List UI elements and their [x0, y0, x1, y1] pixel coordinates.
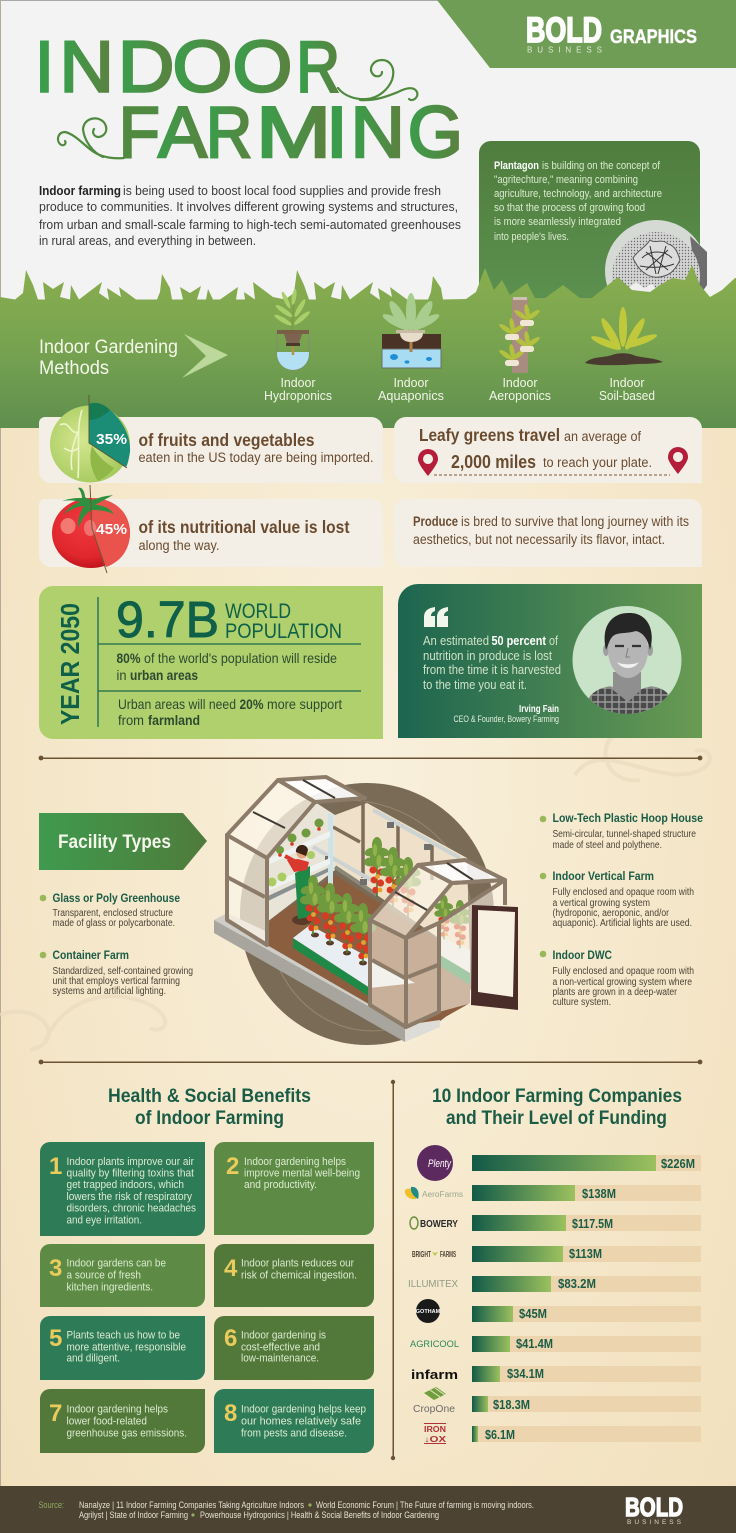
pipes and lamps: [313, 810, 460, 885]
arrow: methods chevron: [182, 334, 228, 378]
stat text: of fruits and vegetables: [138, 430, 315, 450]
benefit card 2: Indoor gardening helps: [244, 1156, 346, 1168]
facility: indoor dwc: plants are grown in a deep-water: [552, 987, 678, 998]
logo: Infarm: infarm: [411, 1367, 458, 1382]
intro paragraph: is being used to boost local food supplies and provide fresh: [123, 183, 441, 198]
benefit card 3: [40, 1244, 205, 1307]
leafy text: 2,000 miles: [451, 452, 536, 472]
bar chart: company funding: [472, 1155, 701, 1442]
urban stats: in: [116, 667, 126, 683]
funding values: $113M: [569, 1247, 602, 1261]
stat text: [138, 430, 374, 465]
right trough: [440, 937, 470, 985]
front trough: [293, 925, 415, 997]
title: O: [233, 28, 292, 108]
method labels: Aeroponics: [489, 388, 551, 403]
greenhouse illustration: [214, 777, 518, 1045]
quote text: [423, 634, 561, 724]
title: I: [326, 93, 348, 173]
side wall: [267, 802, 335, 922]
benefit card 7: Indoor gardening helps: [66, 1404, 168, 1416]
heading: health and social benefits: of Indoor Farming: [135, 1108, 284, 1129]
panel: year 2050: [39, 586, 383, 739]
funding values: $41.4M: [516, 1337, 553, 1351]
panel: 45 percent lost: [39, 485, 383, 573]
plantagon text: is building on the concept of: [542, 160, 661, 172]
benefit card 4: [214, 1244, 374, 1307]
intro paragraph: [39, 183, 461, 248]
logo: AeroFarms: AeroFarms: [422, 1189, 463, 1199]
benefit card 1: disorders, chronic headaches: [66, 1202, 196, 1214]
logo: CropOne: [413, 1387, 455, 1415]
plantagon text: Plantagon: [494, 160, 539, 172]
9.7B population: POPULATION: [225, 620, 342, 643]
icon: aquaponics: [381, 293, 441, 368]
quote text: of: [549, 634, 558, 648]
plantagon text: agriculture, technology, and architecture: [494, 188, 662, 200]
leafy text: to reach your plate.: [543, 455, 652, 470]
facility: vertical farm: aquaponic). Artificial lights are used.: [552, 918, 692, 929]
green grass band: [0, 265, 736, 428]
funding values: $226M: [661, 1157, 695, 1171]
title: [35, 28, 463, 173]
logo: Plenty: [417, 1145, 453, 1181]
title: N: [60, 28, 114, 108]
facility: vertical farm: Fully enclosed and opaque room with: [552, 887, 694, 898]
benefit card 2: [214, 1142, 374, 1235]
benefit card 1: [40, 1142, 205, 1236]
back wall frame: [333, 800, 432, 895]
sources: Nanalyze | 11 Indoor Farming Companies Taking Agriculture Indoors: [79, 1500, 304, 1510]
panel: 35 percent imported: [39, 395, 383, 483]
facility: indoor dwc: Indoor DWC: [552, 948, 612, 962]
facility: glass or poly greenhouse: Transparent, enclosed structure: [52, 908, 173, 919]
facility: vertical farm: [540, 869, 694, 929]
benefit card 5: more attentive, responsible: [66, 1342, 186, 1354]
intro paragraph: Indoor farming: [39, 183, 121, 198]
heading: ten companies: 10 Indoor Farming Companies: [432, 1086, 682, 1107]
heading: ten companies: [432, 1086, 682, 1129]
benefit card 1: 1: [49, 1153, 62, 1180]
facility: glass or poly greenhouse: made of glass or polycarbonate.: [52, 918, 175, 929]
logo: BrightFarms: FARMS: [440, 1250, 456, 1259]
facility: vertical farm: a vertical growing system: [552, 898, 650, 909]
facility: indoor dwc: [540, 948, 694, 1008]
facility: indoor dwc: Fully enclosed and opaque room with: [552, 966, 694, 977]
logo: CropOne: CropOne: [413, 1403, 455, 1415]
title: D: [118, 28, 174, 108]
title: N: [351, 93, 405, 173]
benefit card 5: and diligent.: [66, 1352, 120, 1364]
urban stats: urban areas: [130, 667, 198, 683]
sources: Agrilyst | State of Indoor Farming: [79, 1510, 188, 1520]
title flourish right: [338, 60, 417, 100]
stat text: eaten in the US today are being imported.: [138, 450, 374, 465]
stat text: [138, 517, 350, 553]
icon: quote marks: [424, 607, 448, 627]
facility: glass or poly greenhouse: Glass or Poly Greenhouse: [52, 891, 180, 905]
9.7B population: WORLD: [225, 600, 291, 623]
sources: Source:: [38, 1500, 64, 1510]
method labels: Indoor: [502, 375, 538, 390]
urban stats: 80%: [116, 650, 141, 666]
banner: facility types: Facility Types: [58, 832, 171, 853]
title: R: [296, 28, 340, 108]
method labels: Indoor: [280, 375, 316, 390]
logo: Illumitex: ILLUMITEX: [408, 1279, 458, 1290]
logo: Iron Ox: ↓OX: [424, 1435, 447, 1444]
benefit card 6: cost-effective and: [241, 1342, 320, 1354]
funding values: $138M: [582, 1187, 616, 1201]
logo: Iron Ox: [424, 1423, 447, 1444]
panel: produce bred: is bred to survive that long journey with its: [461, 514, 689, 529]
sources: Powerhouse Hydroponics | Health & Social Benefits of Indoor Gardening: [200, 1510, 439, 1520]
urban stats: Urban areas will need: [118, 696, 236, 712]
logo: Gotham Greens: [416, 1299, 441, 1323]
logo: AeroFarms: [405, 1187, 463, 1199]
benefit card 6: 6: [224, 1325, 237, 1352]
stat text: along the way.: [138, 538, 220, 553]
facility: hoop house: Low-Tech Plastic Hoop House: [552, 811, 703, 825]
benefit card 3: kitchen ingredients.: [66, 1282, 153, 1294]
front house frame: [370, 860, 505, 1027]
quote text: to the time you eat it.: [423, 678, 527, 692]
benefit card 1: get trapped indoors, which: [66, 1179, 184, 1191]
urban stats: [116, 650, 342, 728]
funding values: $83.2M: [558, 1277, 596, 1291]
benefit card 1: Indoor plants improve our air: [66, 1156, 194, 1168]
icon: location pin left: [418, 449, 438, 476]
panel: plantagon: [479, 141, 707, 322]
facility: hoop house: [540, 811, 703, 851]
quote text: An estimated: [423, 634, 489, 648]
logo: Agricool: AGRICOOL: [410, 1339, 459, 1349]
back row tomato plants: [363, 837, 422, 917]
bold business graphics logo: [526, 11, 697, 54]
funding values: $34.1M: [507, 1367, 544, 1381]
benefit card 7: [40, 1389, 205, 1453]
method labels: Aquaponics: [378, 388, 444, 403]
plantagon text: so that the process of growing food: [494, 202, 645, 214]
facility: vertical farm: Indoor Vertical Farm: [552, 869, 654, 883]
title: A: [158, 93, 207, 173]
quote text: 50 percent: [492, 634, 547, 648]
funding values: $45M: [519, 1307, 547, 1321]
benefit card 4: 4: [224, 1255, 238, 1282]
facility: container farm: Standardized, self-contained growing: [52, 966, 193, 977]
benefit card 3: 3: [49, 1255, 62, 1282]
concrete slab: [214, 913, 440, 1042]
title: M: [256, 93, 331, 173]
funding values: [485, 1157, 695, 1442]
urban stats: of the world's population will reside: [144, 650, 337, 666]
sources: World Economic Forum | The Future of farming is moving indoors.: [316, 1500, 534, 1510]
open door: [471, 905, 518, 1010]
floor: [267, 875, 470, 1025]
benefit card 6: [214, 1316, 374, 1380]
quote text: from the time it is harvested: [423, 663, 561, 677]
back wall: [335, 803, 470, 960]
facility: hoop house: Semi-circular, tunnel-shaped structure: [552, 829, 696, 840]
leafy text: an average of: [564, 429, 641, 444]
panel: produce bred: [394, 499, 702, 567]
heading: health and social benefits: [108, 1086, 311, 1129]
benefit card 5: [40, 1316, 205, 1380]
benefit card 7: greenhouse gas emissions.: [66, 1428, 187, 1440]
method labels: [264, 375, 655, 403]
heading: indoor gardening methods: Indoor Gardening: [39, 336, 178, 358]
stat text: of its nutritional value is lost: [138, 517, 350, 537]
quote text: Irving Fain: [519, 704, 559, 715]
benefit card 1: quality by filtering toxins that: [66, 1168, 194, 1180]
portrait: Irving Fain: [572, 606, 682, 720]
intro paragraph: from urban and small-scale farming to high-tech semi-automated greenhouses: [39, 217, 461, 232]
logo: BrightFarms: [412, 1250, 456, 1259]
logo: Bowery: [410, 1217, 458, 1230]
funding values: $117.5M: [572, 1217, 613, 1231]
heading: indoor gardening methods: [39, 336, 178, 379]
urban stats: from: [118, 712, 144, 728]
facility: indoor dwc: culture system.: [552, 997, 611, 1008]
facility: glass or poly greenhouse: [40, 891, 180, 929]
benefit card 8: 8: [224, 1400, 237, 1427]
logo: Bowery: BOWERY: [420, 1219, 458, 1230]
facility: container farm: Container Farm: [52, 948, 129, 962]
vertical divider: [391, 1080, 395, 1460]
method labels: Soil-based: [599, 388, 655, 403]
top-right logo banner: [437, 0, 736, 68]
benefit card 7: 7: [49, 1400, 62, 1427]
9.7B population: 9.7B: [116, 591, 219, 648]
benefit card 6: low-maintenance.: [241, 1352, 319, 1364]
title: O: [173, 28, 232, 108]
facility: container farm: [40, 948, 193, 997]
benefit card 8: [214, 1389, 374, 1453]
logo: Gotham Greens: GOTHAM: [416, 1309, 441, 1315]
method labels: Indoor: [394, 375, 429, 390]
benefit card 4: risk of chemical ingestion.: [241, 1270, 357, 1282]
rotated year label: YEAR 2050: [55, 603, 85, 725]
urban stats: 20%: [240, 696, 264, 712]
divider: [39, 756, 702, 760]
facility: container farm: systems and artificial lighting.: [52, 986, 166, 997]
benefit card 6: Indoor gardening is: [241, 1330, 326, 1342]
funding values: $18.3M: [493, 1398, 530, 1412]
intro paragraph: produce to communities. It involves different growing systems and structures,: [39, 199, 458, 214]
9.7B population: [116, 591, 342, 648]
quote text: nutrition in produce is lost: [423, 649, 552, 663]
bold business graphics logo: BUSINESS: [527, 46, 602, 54]
footer bold logo: BOLD: [625, 1492, 683, 1522]
plantagon text: "agritechture," meaning combining: [494, 174, 638, 186]
backdrop ellipse: [240, 783, 494, 1045]
title: F: [119, 93, 160, 173]
panel: produce bred: Produce: [413, 514, 458, 529]
leafy text: [419, 425, 652, 472]
decorative swirls: [0, 735, 710, 1050]
benefit card 2: 2: [226, 1153, 239, 1180]
bold business graphics logo: BOLD: [526, 11, 602, 50]
icon: tomato with slice: 45%: [96, 521, 127, 538]
benefit card 7: lower food-related: [66, 1416, 147, 1428]
left house frame: [227, 777, 365, 945]
benefit card 5: 5: [49, 1325, 62, 1352]
front row tomato plants: [299, 875, 471, 963]
heading: ten companies: and Their Level of Funding: [446, 1108, 667, 1129]
banner: facility types: [39, 813, 207, 870]
method labels: Indoor: [610, 375, 645, 390]
panel: produce bred: aesthetics, but not necessarily its flavor, intact.: [413, 532, 665, 547]
plantagon text: is more seamlessly integrated: [494, 216, 621, 228]
panel: quote: [398, 584, 702, 738]
plantagon dome image: [605, 220, 707, 322]
logo: Plenty: Plenty: [428, 1158, 452, 1170]
heading: indoor gardening methods: Methods: [39, 357, 109, 379]
funding values: $6.1M: [485, 1428, 515, 1442]
icon: cabbage with teal slice: 35%: [96, 431, 127, 448]
shelves: [268, 813, 333, 901]
icon: tomato with slice: [52, 485, 130, 573]
benefit card 1: and eye irritation.: [66, 1214, 142, 1226]
logo: Iron Ox: IRON: [424, 1425, 446, 1434]
facility: indoor dwc: a non-vertical growing system where: [552, 977, 692, 988]
leafy text: Leafy greens travel: [419, 425, 560, 445]
benefit card 1: lowers the risk of respiratory: [66, 1191, 192, 1203]
heading: health and social benefits: Health & Social Benefits: [108, 1086, 311, 1107]
plantagon text: [494, 160, 662, 243]
facility: hoop house: made of steel and polythene.: [552, 840, 662, 851]
footer: [0, 1486, 736, 1533]
bar tracks: [472, 1155, 701, 1442]
urban stats: farmland: [148, 712, 200, 728]
title flourish left: [58, 118, 124, 158]
method labels: Hydroponics: [264, 388, 332, 403]
facility: vertical farm: (hydroponic, aeroponic, and/or: [552, 908, 670, 919]
benefit card 8: from pests and disease.: [241, 1428, 347, 1440]
title: G: [408, 93, 463, 173]
bold business graphics logo: GRAPHICS: [610, 27, 697, 48]
worker: [285, 845, 312, 925]
benefit card 3: a source of fresh: [66, 1270, 141, 1282]
benefit card 8: Indoor gardening helps keep: [241, 1404, 366, 1416]
plantagon text: into people's lives.: [494, 231, 569, 243]
icon: hydroponics: [273, 289, 311, 370]
icon: location pin right: [668, 447, 688, 474]
icon: soil-based: [585, 307, 663, 365]
urban stats: more support: [267, 696, 342, 712]
logo: BrightFarms: BRIGHT: [412, 1250, 431, 1259]
footer bold logo: BUSINESS: [627, 1519, 682, 1526]
benefit card 5: Plants teach us how to be: [66, 1330, 180, 1342]
title: I: [35, 28, 54, 108]
panel: leafy greens travel: [394, 417, 702, 483]
benefit card 3: Indoor gardens can be: [66, 1258, 166, 1270]
sources: [38, 1500, 534, 1520]
title: R: [206, 93, 252, 173]
benefit card 2: and productivity.: [244, 1179, 317, 1191]
icon: cabbage with teal slice: [50, 395, 130, 482]
intro paragraph: in rural areas, and everything in between.: [39, 233, 256, 248]
bars: [472, 1155, 656, 1442]
divider: [39, 1060, 702, 1064]
benefit card 2: improve mental well-being: [244, 1168, 360, 1180]
quote text: CEO & Founder, Bowery Farming: [454, 714, 559, 724]
facility: container farm: unit that employs vertical farming: [52, 976, 180, 987]
benefit card 4: Indoor plants reduces our: [241, 1258, 354, 1270]
icon: aeroponics: [498, 297, 541, 373]
benefit card 8: our homes relatively safe: [241, 1416, 361, 1428]
